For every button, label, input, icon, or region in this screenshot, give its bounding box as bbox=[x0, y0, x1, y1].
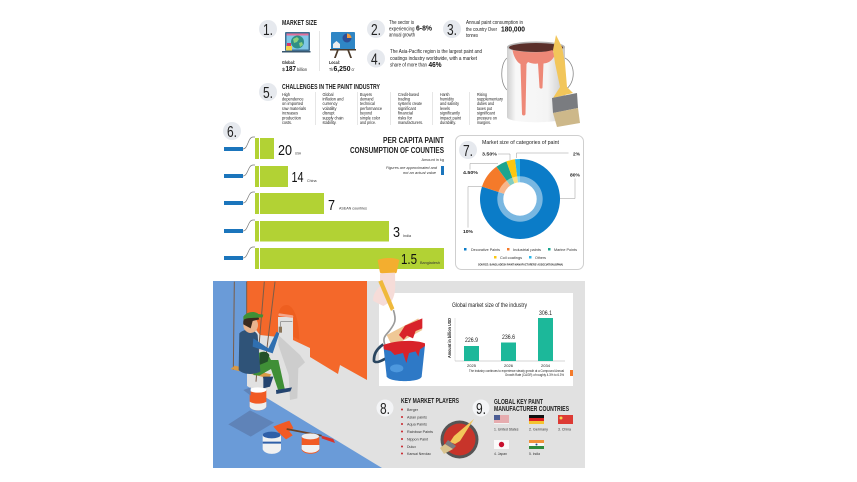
challenge: raw materials: costs. bbox=[282, 120, 292, 125]
bar 2034 bbox=[538, 311, 553, 368]
challenge: buyers demand: simple color bbox=[360, 116, 380, 120]
section 3: annual consumption: 180,000 bbox=[501, 26, 525, 34]
text: local market: 6,250 bbox=[334, 66, 351, 73]
number badge 7: 7. bbox=[463, 143, 473, 160]
section 2: annual growth bbox=[367, 20, 433, 39]
data labels: 3.50% bbox=[482, 152, 497, 156]
player list: Berger bbox=[407, 408, 419, 412]
challenge: buyers demand: performance bbox=[360, 106, 382, 111]
section 4: Asia-Pacific share: 4. bbox=[371, 52, 381, 68]
challenge: duties and taxes: margins. bbox=[477, 120, 491, 125]
challenge: duties and taxes: supplementary bbox=[477, 96, 504, 102]
challenge: credit bbox=[398, 92, 423, 125]
challenge: raw materials: production bbox=[282, 116, 301, 120]
player list: Kansai Nerolac bbox=[407, 452, 431, 456]
text: global market: $ bbox=[282, 67, 286, 72]
icon: laptop with globe bbox=[282, 32, 310, 52]
challenge: inflation bbox=[322, 92, 344, 125]
number badge 6: 6. bbox=[227, 124, 237, 141]
bar 2025 bbox=[464, 338, 479, 368]
bar: ASEAN countries 7: ASEAN countries bbox=[339, 206, 367, 210]
challenge: raw materials: on imported bbox=[282, 101, 303, 106]
section 2: annual growth: The sector is bbox=[389, 20, 414, 26]
heading: per capita bbox=[350, 136, 445, 155]
bar 2025: 2025 bbox=[467, 364, 476, 368]
y axis label: Amount in billion USD bbox=[447, 317, 452, 358]
flag: United States: 1. United States bbox=[494, 428, 519, 432]
legend: Industrial paints bbox=[513, 248, 541, 252]
challenge: raw materials: increases bbox=[282, 110, 299, 116]
challenge: buyers demand: beyond bbox=[360, 110, 372, 116]
text: global market: Global: bbox=[282, 60, 295, 65]
data labels: 2% bbox=[573, 152, 580, 156]
section 4: Asia-Pacific share: coatings industry worldwide, with a market bbox=[390, 56, 477, 62]
challenge: inflation: volatility bbox=[322, 106, 337, 111]
player list: Asian paints bbox=[407, 416, 427, 420]
text: local market: Local: bbox=[329, 60, 340, 65]
number badge 9: 9. bbox=[476, 401, 486, 418]
bar: India 3: India bbox=[403, 234, 411, 238]
donut chart bbox=[480, 159, 560, 239]
note: figures approximated: not an actual value bbox=[403, 171, 436, 175]
player list: Aqua Paints bbox=[407, 422, 427, 426]
bar: India 3 bbox=[224, 220, 411, 242]
challenge: duties and taxes: pressure on bbox=[477, 116, 497, 120]
illustration: painter on swing bbox=[228, 282, 335, 454]
chart: global market size of the industry bbox=[447, 303, 573, 377]
challenge: humidity: durability. bbox=[440, 120, 456, 125]
legend: Coil coatings bbox=[500, 256, 522, 260]
bar: ASEAN countries 7: 7 bbox=[328, 197, 335, 214]
bar: India 3: 3 bbox=[393, 224, 400, 241]
heading: key market players: KEY MARKET PLAYERS bbox=[401, 398, 459, 405]
legend: Marine Points bbox=[554, 248, 577, 252]
text: global market: 187 bbox=[286, 66, 296, 73]
challenge: humidity: levels bbox=[440, 106, 451, 111]
challenge: buyers demand: demand bbox=[360, 96, 374, 102]
challenge: humidity: significantly bbox=[440, 110, 461, 116]
text: local market bbox=[329, 60, 355, 73]
flag: China: 3. China bbox=[558, 428, 571, 432]
note: figures approximated bbox=[386, 166, 444, 175]
challenge: humidity: humidity bbox=[440, 96, 455, 102]
challenge: duties and taxes bbox=[477, 92, 504, 125]
bar: China 14 bbox=[224, 165, 317, 187]
player list: Rainbow Paints bbox=[407, 430, 433, 434]
flag: India: 5. India bbox=[529, 452, 540, 456]
bar: USA 20: 20 bbox=[278, 142, 292, 159]
panel 7: market size of categories of paint bbox=[456, 136, 584, 270]
section 3: annual consumption: 3. bbox=[447, 22, 457, 39]
text: global market bbox=[282, 60, 307, 73]
bar: Bangladesh 1.5: Bangladesh bbox=[420, 261, 440, 265]
illustration: paint can with brush bbox=[502, 35, 580, 127]
challenge: credit: trading bbox=[398, 96, 410, 102]
challenge: inflation: currency bbox=[322, 101, 338, 106]
section 9: global key paint manufacturer countries bbox=[472, 399, 573, 456]
bottom panel background bbox=[213, 281, 585, 468]
chart note bbox=[469, 369, 573, 377]
challenge: duties and taxes: taxes put bbox=[477, 106, 493, 111]
section 2: annual growth: experiencing bbox=[389, 26, 414, 32]
section 2: annual growth: 6-8% bbox=[416, 26, 433, 32]
challenge: duties and taxes: significant bbox=[477, 110, 496, 116]
challenge: inflation: inflation and bbox=[322, 96, 344, 102]
text: global market: billion bbox=[297, 67, 307, 72]
section 3: annual consumption: tonnes bbox=[466, 33, 478, 39]
challenge: raw materials: High bbox=[282, 92, 290, 97]
legend bbox=[464, 248, 577, 260]
bar 2026 bbox=[501, 335, 516, 368]
section 3: annual consumption bbox=[443, 20, 525, 39]
player list: Dulux bbox=[407, 445, 416, 449]
section 1: market size bbox=[259, 20, 356, 73]
challenge: duties and taxes: duties and bbox=[477, 101, 494, 106]
challenge: credit: financial bbox=[398, 110, 413, 116]
illustration: gloved hand, roller and blue bucket bbox=[373, 258, 425, 381]
heading: per capita: PER CAPITA PAINT bbox=[383, 136, 444, 145]
number badge 5: 5. bbox=[263, 85, 273, 102]
heading: market size: MARKET SIZE bbox=[282, 20, 317, 27]
bar: ASEAN countries 7 bbox=[224, 192, 367, 214]
divider bbox=[319, 31, 320, 71]
section 3: annual consumption: the country Over bbox=[466, 27, 497, 33]
legend: Others bbox=[535, 256, 546, 260]
section 8: key market players bbox=[376, 398, 478, 458]
player list bbox=[401, 408, 433, 456]
number badge 6 bbox=[223, 122, 241, 141]
heading: challenges: CHALLENGES IN THE PAINT INDUSTRY bbox=[282, 84, 380, 91]
challenge: credit: systems create bbox=[398, 101, 422, 106]
heading: GLOBAL KEY PAINT bbox=[494, 399, 544, 406]
heading: per capita: CONSUMPTION OF COUNTIES bbox=[350, 146, 445, 155]
bar 2025: 226.9 bbox=[465, 338, 479, 344]
challenge: humidity: Harsh bbox=[440, 92, 450, 97]
challenge: humidity: impact paint bbox=[440, 116, 462, 120]
bar: USA 20 bbox=[224, 137, 301, 159]
data labels bbox=[463, 152, 580, 234]
section 4: Asia-Pacific share: share of more than bbox=[390, 62, 427, 68]
heading bbox=[494, 399, 569, 413]
challenge: credit: Credit-based bbox=[398, 92, 419, 97]
legend: Decorative Paints bbox=[471, 248, 500, 252]
section 2: annual growth: annual growth bbox=[389, 32, 415, 38]
icon: top view of red paint can with brush bbox=[440, 419, 478, 458]
bar: Bangladesh 1.5: 1.5 bbox=[401, 251, 417, 268]
bar 2034: 2034 bbox=[541, 364, 550, 368]
challenge: credit: significant bbox=[398, 106, 417, 111]
data labels: 4.50% bbox=[463, 170, 478, 175]
callout lines bbox=[468, 153, 575, 228]
flag: Japan: 4. Japan bbox=[494, 452, 507, 456]
bar 2034: 306.1 bbox=[539, 311, 553, 317]
challenge: inflation: Global bbox=[322, 92, 334, 97]
challenge: raw materials: dependence bbox=[282, 96, 304, 102]
player list: Nippon Paint bbox=[407, 438, 428, 442]
number badge 8: 8. bbox=[380, 401, 390, 418]
challenge: buyers demand: technical bbox=[360, 101, 375, 106]
data labels: 80% bbox=[570, 172, 580, 178]
chart heading: Global market size of the industry bbox=[452, 303, 527, 309]
section 4: Asia-Pacific share bbox=[367, 49, 482, 69]
challenge: duties and taxes: Rising bbox=[477, 92, 487, 97]
text: local market: Tk bbox=[329, 67, 334, 72]
challenge: inflation: disrupt bbox=[322, 110, 335, 116]
section 4: Asia-Pacific share: 46% bbox=[428, 62, 442, 69]
chart note: Growth Rate (CAGR) of roughly 4.3% to 6.3% bbox=[505, 373, 564, 377]
heading: MANUFACTURER COUNTRIES bbox=[494, 406, 569, 413]
challenge: raw materials bbox=[282, 92, 307, 125]
bar: USA 20: USA bbox=[295, 152, 301, 156]
challenge: credit: risks for bbox=[398, 116, 412, 120]
challenge: buyers demand: Buyers bbox=[360, 92, 373, 97]
challenge: raw materials: raw materials bbox=[282, 106, 307, 111]
icon: presentation easel bbox=[330, 32, 356, 58]
number badge 1: 1. bbox=[263, 22, 273, 39]
flag: Germany: 2. Germany bbox=[529, 428, 548, 432]
note: amount in kg: Amount in kg bbox=[422, 158, 444, 162]
heading: market size of categories: Market size of categories of paint bbox=[482, 140, 559, 146]
note: figures approximated: Figures are approximated and bbox=[386, 166, 438, 170]
challenge: inflation: supply chain bbox=[322, 116, 344, 120]
section 2: annual growth: 2. bbox=[371, 22, 381, 39]
challenge: buyers demand: and price. bbox=[360, 120, 376, 125]
data labels: 10% bbox=[463, 229, 473, 234]
challenge: credit: manufacturers. bbox=[398, 120, 423, 125]
section 4: Asia-Pacific share: The Asia-Pacific region is the largest paint and bbox=[390, 49, 482, 55]
bar: Bangladesh 1.5 bbox=[224, 247, 444, 269]
challenge: humidity bbox=[440, 92, 462, 125]
section 6: per capita consumption chart bbox=[223, 122, 445, 269]
section 5: challenges in the paint industry bbox=[259, 83, 504, 125]
number badge 5 bbox=[259, 83, 277, 102]
challenge: buyers demand bbox=[360, 92, 382, 125]
chart note: The industry continues to experience steady growth at a Compound Annual bbox=[469, 369, 564, 373]
text: local market: cr bbox=[352, 67, 355, 72]
source: SOURCE: BANGLADESH PAINT MANUFACTURERS' ASSOCIATION (BPMA) bbox=[478, 262, 563, 266]
challenge: inflation: stability. bbox=[322, 120, 336, 125]
bar: China 14: 14 bbox=[292, 169, 304, 186]
challenge: humidity: and salinity bbox=[440, 101, 460, 106]
bar 2026: 236.6 bbox=[502, 335, 516, 341]
section 3: annual consumption: Annual paint consumption in bbox=[466, 20, 523, 26]
bar: China 14: China bbox=[307, 179, 317, 183]
bar 2026: 2026 bbox=[504, 364, 513, 368]
